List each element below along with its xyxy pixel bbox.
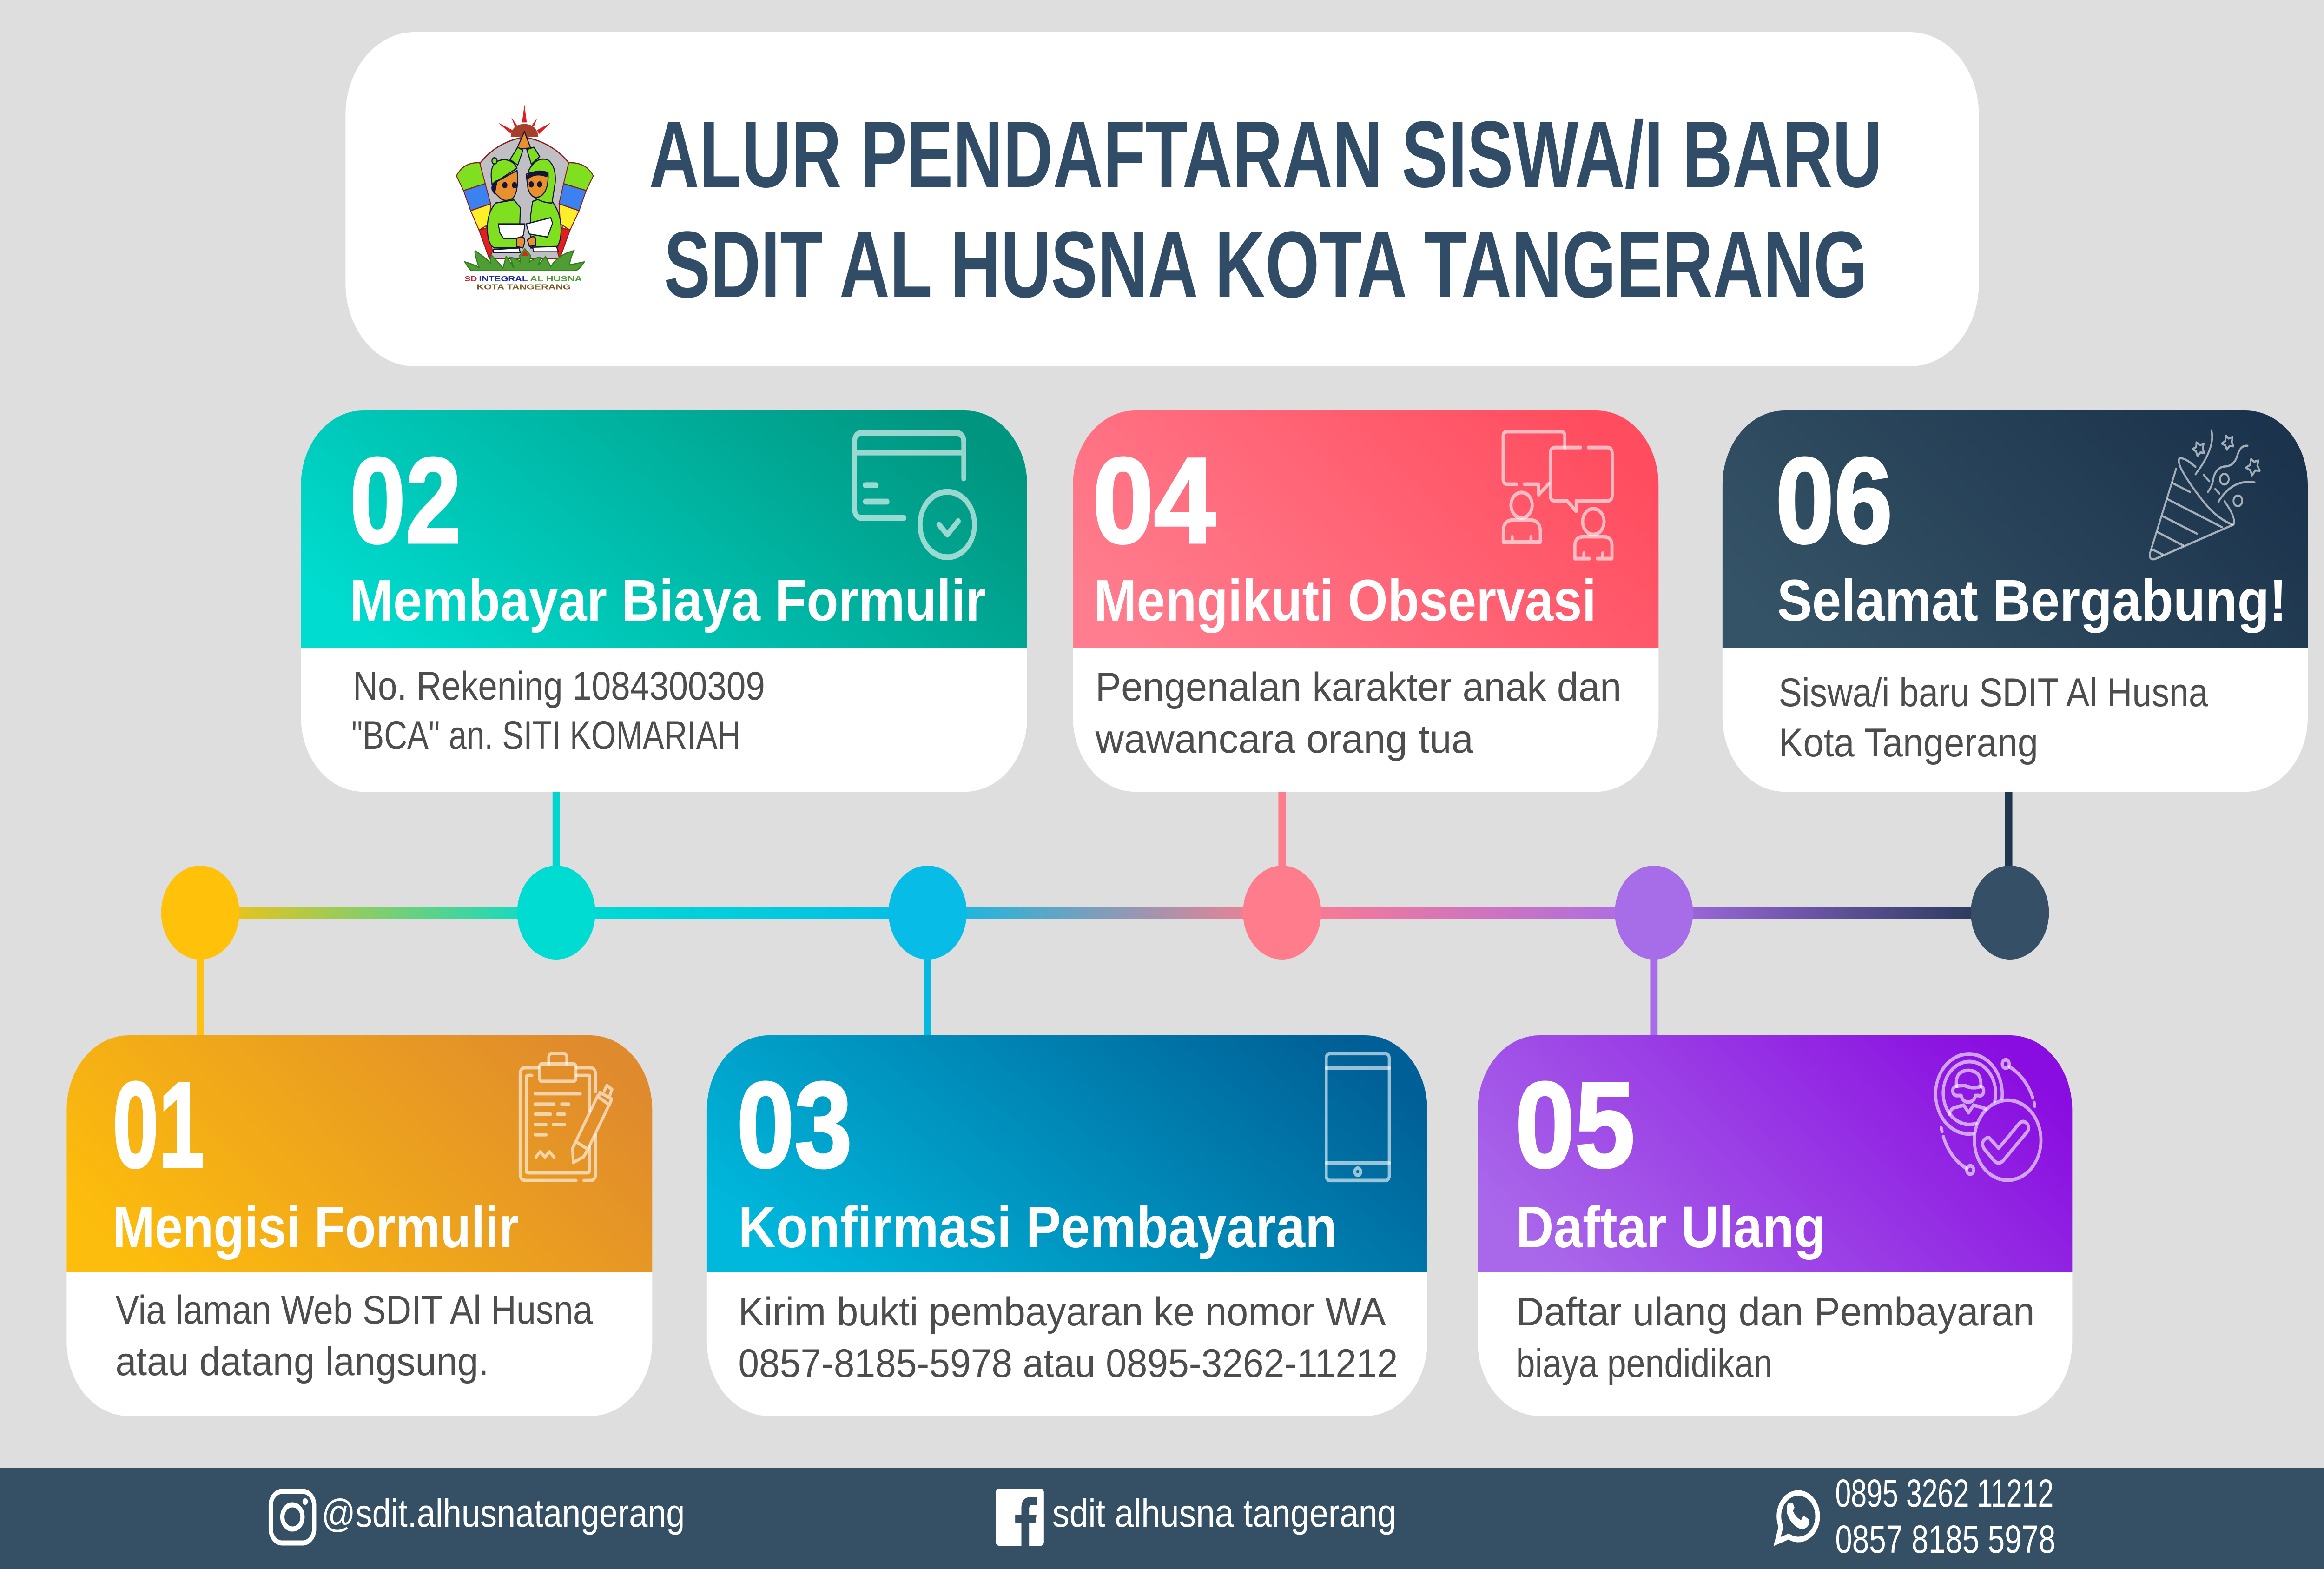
card 04: Mengikuti Observasi xyxy=(1073,410,1658,792)
card 05: Daftar Ulang: Daftar Ulang xyxy=(1516,1194,1826,1260)
phone numbers xyxy=(1835,1472,2055,1561)
icon: clipboard and pencil xyxy=(520,1053,612,1180)
card 06: Selamat Bergabung!: Kota Tangerang xyxy=(1779,720,2038,765)
phone numbers: 0895 3262 11212 xyxy=(1835,1472,2053,1515)
timeline connector stems xyxy=(200,786,2009,1041)
logo: SD Integral Al Husna: KOTA TANGERANG xyxy=(477,283,571,291)
logo: SD Integral Al Husna: INTEGRAL xyxy=(479,275,528,283)
card 03: Konfirmasi Pembayaran xyxy=(707,1035,1427,1416)
card 06: Selamat Bergabung!: Selamat Bergabung! xyxy=(1777,568,2287,633)
logo: SD Integral Al Husna: AL HUSNA xyxy=(530,275,582,283)
card 02: Membayar Biaya Formulir: No. Rekening 1084300309 xyxy=(353,663,765,708)
card 01: Mengisi Formulir: atau datang langsung. xyxy=(115,1339,489,1384)
instagram handle: @sdit.alhusnatangerang xyxy=(322,1492,685,1535)
card 01: Mengisi Formulir: 01 xyxy=(112,1057,205,1193)
card 05: Daftar Ulang: 05 xyxy=(1515,1057,1635,1193)
icon: whatsapp xyxy=(1777,1493,1818,1542)
card 03: Konfirmasi Pembayaran: 0857-8185-5978 atau 0895-3262-11212 xyxy=(738,1341,1398,1385)
card 02: Membayar Biaya Formulir xyxy=(301,410,1027,792)
card 02: Membayar Biaya Formulir: Membayar Biaya Formulir xyxy=(350,568,986,633)
card 06: Selamat Bergabung!: Siswa/i baru SDIT Al Husna xyxy=(1779,670,2209,715)
card 04: Mengikuti Observasi: wawancara orang tua xyxy=(1095,716,1474,761)
icon: smartphone xyxy=(1326,1053,1389,1180)
card 04: Mengikuti Observasi: 04 xyxy=(1092,433,1215,569)
icon: verified person xyxy=(1935,1054,2041,1180)
card 05: Daftar Ulang: biaya pendidikan xyxy=(1516,1341,1772,1385)
icon: instagram xyxy=(271,1491,314,1543)
card 02: Membayar Biaya Formulir: "BCA" an. SITI KOMARIAH xyxy=(351,713,740,757)
icon: facebook xyxy=(996,1489,1044,1546)
card 01: Mengisi Formulir: Mengisi Formulir xyxy=(112,1194,519,1260)
title xyxy=(649,101,1882,317)
logo: SD Integral Al Husna: SD xyxy=(464,275,477,283)
icon: card with check xyxy=(854,433,975,557)
card 03: Konfirmasi Pembayaran: Konfirmasi Pembayaran xyxy=(738,1194,1337,1260)
footer bar xyxy=(0,1468,2324,1569)
card 06: Selamat Bergabung! xyxy=(1723,410,2308,792)
timeline xyxy=(161,866,2049,960)
card 04: Mengikuti Observasi: Mengikuti Observasi xyxy=(1094,568,1596,633)
card 05: Daftar Ulang xyxy=(1478,1035,2072,1416)
card 04: Mengikuti Observasi: Pengenalan karakter anak dan xyxy=(1096,664,1621,709)
logo: SD Integral Al Husna xyxy=(456,105,593,291)
icon: party popper xyxy=(2150,430,2260,559)
card 01: Mengisi Formulir: Via laman Web SDIT Al Husna xyxy=(115,1287,593,1332)
card 06: Selamat Bergabung!: 06 xyxy=(1776,433,1893,569)
card 01: Mengisi Formulir xyxy=(66,1035,652,1416)
card 02: Membayar Biaya Formulir: 02 xyxy=(350,433,462,569)
title: SDIT AL HUSNA KOTA TANGERANG xyxy=(664,212,1868,317)
icon: two people talking xyxy=(1503,431,1612,559)
facebook name: sdit alhusna tangerang xyxy=(1052,1492,1396,1535)
card 03: Konfirmasi Pembayaran: Kirim bukti pembayaran ke nomor WA xyxy=(738,1289,1386,1334)
card 05: Daftar Ulang: Daftar ulang dan Pembayaran xyxy=(1516,1289,2035,1334)
card 03: Konfirmasi Pembayaran: 03 xyxy=(737,1057,852,1193)
header panel xyxy=(345,32,1979,366)
phone numbers: 0857 8185 5978 xyxy=(1835,1518,2056,1561)
title: ALUR PENDAFTARAN SISWA/I BARU xyxy=(649,101,1882,207)
